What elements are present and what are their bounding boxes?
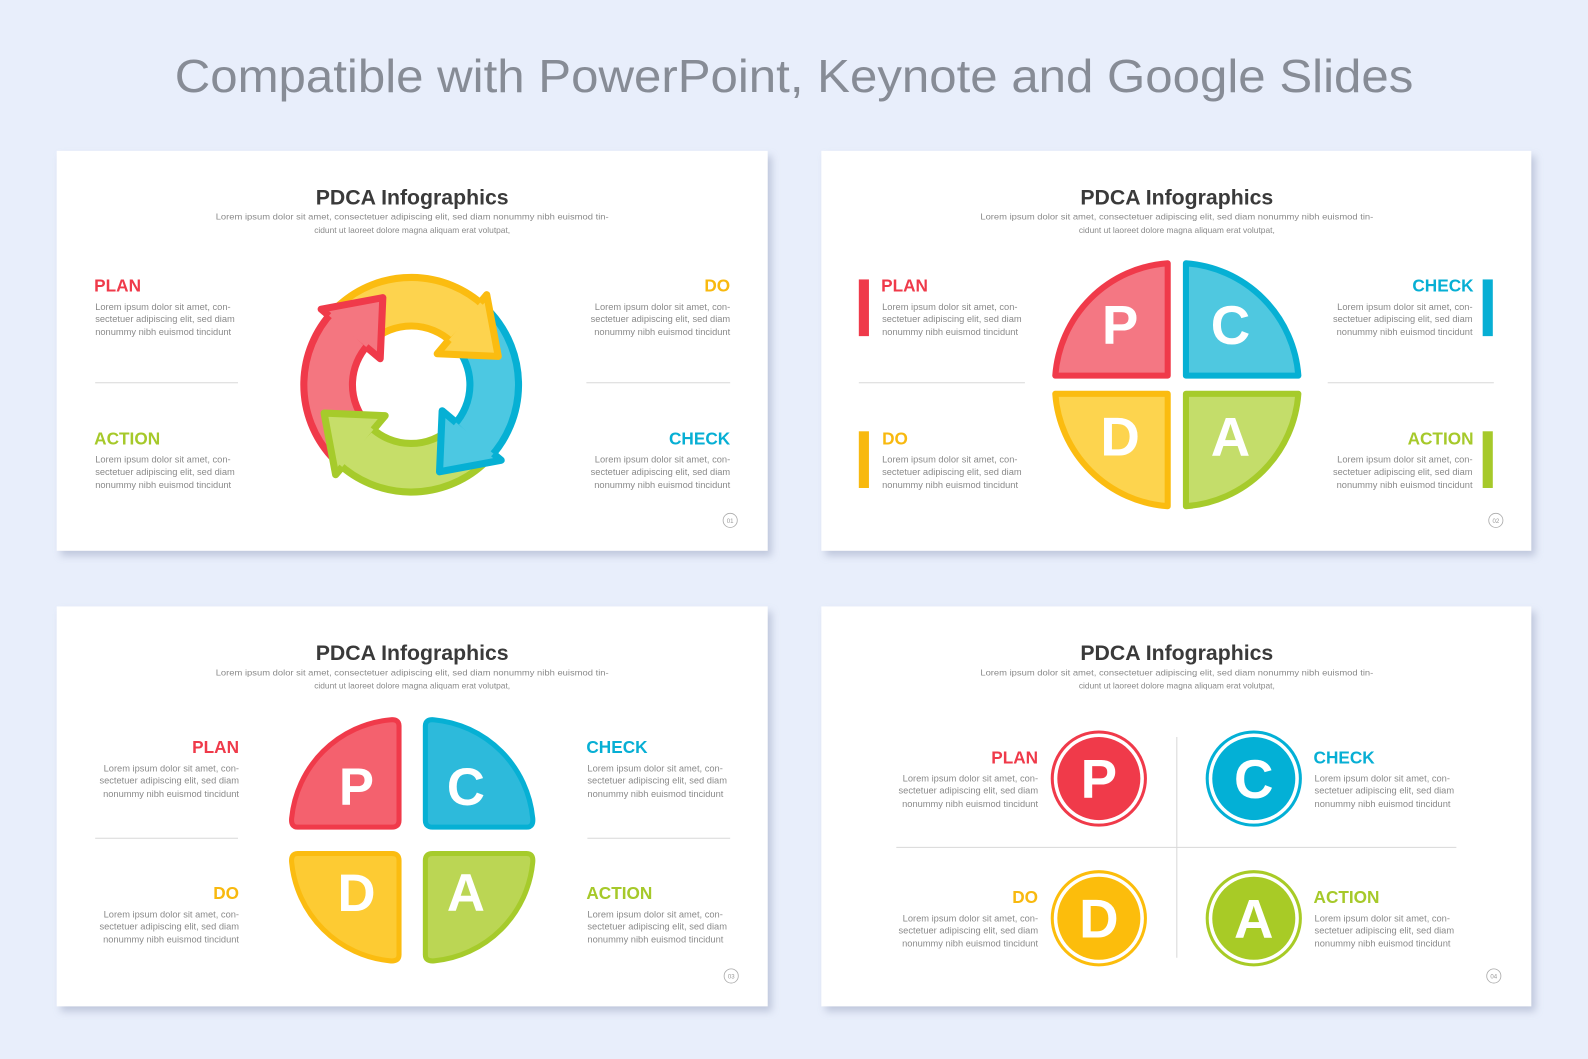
text: do: sectetuer adipiscing elit, sed diam (591, 314, 730, 324)
icon: circle A (1207, 872, 1300, 965)
text: plan (99, 737, 239, 799)
text: action: nonummy nibh euismod tincidunt (95, 480, 232, 490)
text: do: sectetuer adipiscing elit, sed diam (882, 467, 1022, 477)
icon: circle P: P (1081, 749, 1117, 810)
text: do: sectetuer adipiscing elit, sed diam (899, 925, 1038, 935)
text: do: DO (213, 883, 239, 903)
text: action (586, 883, 727, 945)
heading: PDCA Infographics (1080, 641, 1273, 665)
chart: pie quadrants (1055, 263, 1298, 506)
heading: PDCA Infographics (316, 186, 509, 210)
chart: petal quadrants (292, 720, 533, 961)
text: action (1333, 428, 1493, 490)
icon: circle C: C (1234, 749, 1274, 810)
page number: 04 (1490, 975, 1498, 981)
page number: 01 (727, 519, 734, 525)
text: action: Lorem ipsum dolor sit amet, con- (1337, 455, 1473, 465)
text: plan: nonummy nibh euismod tincidunt (95, 327, 232, 337)
quadrant D: D (1100, 407, 1140, 468)
page number (724, 969, 738, 983)
icon: circle P (1052, 732, 1145, 825)
text: action: sectetuer adipiscing elit, sed diam (1315, 925, 1454, 935)
text: do: DO (1012, 887, 1038, 907)
heading: Lorem ipsum dolor sit amet, consectetuer adipiscing elit, sed diam nonummy nibh euismod tin- (980, 667, 1374, 677)
text: check: CHECK (1412, 276, 1474, 296)
text: plan: Lorem ipsum dolor sit amet, con- (95, 302, 231, 312)
text: plan: PLAN (192, 737, 239, 757)
text: action: nonummy nibh euismod tincidunt (1337, 480, 1473, 490)
heading (216, 641, 609, 690)
text: do: nonummy nibh euismod tincidunt (594, 327, 731, 337)
icon: circle C (1207, 732, 1300, 825)
text: action: nonummy nibh euismod tincidunt (587, 935, 724, 945)
text: do (591, 276, 731, 337)
text: plan: sectetuer adipiscing elit, sed diam (99, 776, 239, 786)
quadrant C: C (1211, 295, 1250, 356)
heading (980, 186, 1374, 235)
page number (723, 513, 737, 527)
heading: cidunt ut laoreet dolore magna aliquam erat volutpat, (314, 680, 510, 690)
text: check: nonummy nibh euismod tincidunt (1337, 327, 1473, 337)
text: do: nonummy nibh euismod tincidunt (103, 935, 239, 945)
heading: cidunt ut laoreet dolore magna aliquam erat volutpat, (1079, 225, 1275, 235)
petal C: C (447, 758, 485, 817)
text: check: sectetuer adipiscing elit, sed diam (591, 467, 730, 477)
text: check: nonummy nibh euismod tincidunt (587, 789, 724, 799)
text: action: ACTION (586, 883, 652, 903)
panel 3: petals (57, 606, 768, 1006)
heading (980, 641, 1374, 690)
petal C (425, 720, 533, 827)
text: plan: sectetuer adipiscing elit, sed diam (899, 786, 1038, 796)
page number (1489, 513, 1503, 527)
text: check (591, 428, 731, 490)
quadrant C (1186, 263, 1298, 376)
text: check: CHECK (1314, 747, 1375, 767)
page number (1487, 969, 1501, 983)
text: plan: PLAN (881, 276, 928, 296)
petal D (292, 853, 399, 961)
text: plan (899, 747, 1038, 809)
arrow heads (321, 295, 501, 475)
text: check: Lorem ipsum dolor sit amet, con- (1337, 302, 1473, 312)
heading: PDCA Infographics (316, 641, 509, 665)
text: plan: sectetuer adipiscing elit, sed diam (95, 314, 235, 324)
text: action: nonummy nibh euismod tincidunt (1315, 939, 1451, 949)
text: action (94, 428, 235, 490)
heading: cidunt ut laoreet dolore magna aliquam erat volutpat, (314, 225, 510, 235)
text: action: ACTION (1314, 887, 1380, 907)
page number: 03 (728, 975, 735, 981)
text: plan: nonummy nibh euismod tincidunt (103, 789, 239, 799)
text: do: Lorem ipsum dolor sit amet, con- (903, 913, 1038, 923)
text: action: Lorem ipsum dolor sit amet, con- (95, 455, 231, 465)
text: do: sectetuer adipiscing elit, sed diam (99, 921, 239, 931)
text: do: Lorem ipsum dolor sit amet, con- (882, 455, 1018, 465)
text: check (1333, 276, 1493, 337)
panel 4: circles grid (821, 606, 1531, 1006)
text: plan: nonummy nibh euismod tincidunt (902, 799, 1038, 809)
text: plan: Lorem ipsum dolor sit amet, con- (903, 774, 1038, 784)
heading: Lorem ipsum dolor sit amet, consectetuer adipiscing elit, sed diam nonummy nibh euismod tin- (216, 212, 609, 222)
text: check: CHECK (586, 737, 648, 757)
heading: Lorem ipsum dolor sit amet, consectetuer adipiscing elit, sed diam nonummy nibh euismod tin- (980, 212, 1374, 222)
text: plan: PLAN (991, 747, 1038, 767)
heading: PDCA Infographics (1080, 186, 1273, 210)
quadrant D (1055, 394, 1168, 506)
text: do: DO (882, 428, 908, 448)
text: do (899, 887, 1038, 949)
icon: circle D: D (1079, 889, 1119, 950)
text: action (1314, 887, 1454, 949)
page number: 02 (1492, 519, 1500, 525)
text: action: ACTION (94, 428, 160, 448)
text: check: sectetuer adipiscing elit, sed diam (587, 776, 727, 786)
heading (216, 186, 609, 235)
text: check: Lorem ipsum dolor sit amet, con- (1315, 774, 1450, 784)
text: check: Lorem ipsum dolor sit amet, con- (587, 763, 723, 773)
petal A: A (447, 864, 485, 923)
text: check: Lorem ipsum dolor sit amet, con- (595, 455, 730, 465)
text: plan: PLAN (94, 276, 141, 296)
text: action: sectetuer adipiscing elit, sed diam (587, 921, 727, 931)
text: action: Lorem ipsum dolor sit amet, con- (1315, 913, 1450, 923)
quadrant P (1055, 263, 1168, 376)
quadrant A: A (1211, 407, 1250, 468)
text: check: sectetuer adipiscing elit, sed diam (1315, 786, 1454, 796)
text: check: nonummy nibh euismod tincidunt (1315, 799, 1451, 809)
panel 1: cycle arrows (57, 151, 768, 551)
text: plan: sectetuer adipiscing elit, sed diam (882, 314, 1022, 324)
petal D: D (337, 864, 376, 923)
text: do: nonummy nibh euismod tincidunt (882, 480, 1018, 490)
text: check: sectetuer adipiscing elit, sed diam (1333, 314, 1473, 324)
text: do: DO (704, 276, 730, 296)
text: do: nonummy nibh euismod tincidunt (902, 939, 1038, 949)
petal P (292, 720, 399, 827)
petal P: P (339, 758, 374, 817)
text: plan (94, 276, 235, 337)
chart: cycle arrows (304, 277, 519, 492)
text: action: Lorem ipsum dolor sit amet, con- (587, 909, 723, 919)
panel 2: pie (821, 151, 1531, 551)
quadrant P: P (1102, 295, 1138, 356)
text: check: CHECK (669, 428, 731, 448)
text: check (586, 737, 727, 799)
text: plan (859, 276, 1022, 337)
text: check (1314, 747, 1454, 809)
text: action: sectetuer adipiscing elit, sed diam (95, 467, 235, 477)
text: do: Lorem ipsum dolor sit amet, con- (595, 302, 730, 312)
icon: circle D (1052, 872, 1145, 965)
text: plan: Lorem ipsum dolor sit amet, con- (882, 302, 1018, 312)
header title: Compatible with PowerPoint, Keynote and Google Slides (175, 50, 1413, 102)
text: action: sectetuer adipiscing elit, sed diam (1333, 467, 1473, 477)
text: action: ACTION (1408, 428, 1474, 448)
text: plan: nonummy nibh euismod tincidunt (882, 327, 1018, 337)
petal A (425, 853, 533, 961)
heading: Lorem ipsum dolor sit amet, consectetuer adipiscing elit, sed diam nonummy nibh euismod tin- (216, 667, 609, 677)
heading: cidunt ut laoreet dolore magna aliquam erat volutpat, (1079, 680, 1275, 690)
quadrant A (1186, 394, 1298, 506)
text: plan: Lorem ipsum dolor sit amet, con- (104, 763, 239, 773)
text: do: Lorem ipsum dolor sit amet, con- (104, 909, 239, 919)
arrow bodies (304, 277, 519, 492)
text: check: nonummy nibh euismod tincidunt (594, 480, 731, 490)
icon: circle A: A (1234, 889, 1274, 950)
text: do (859, 428, 1022, 490)
text: do (99, 883, 239, 945)
